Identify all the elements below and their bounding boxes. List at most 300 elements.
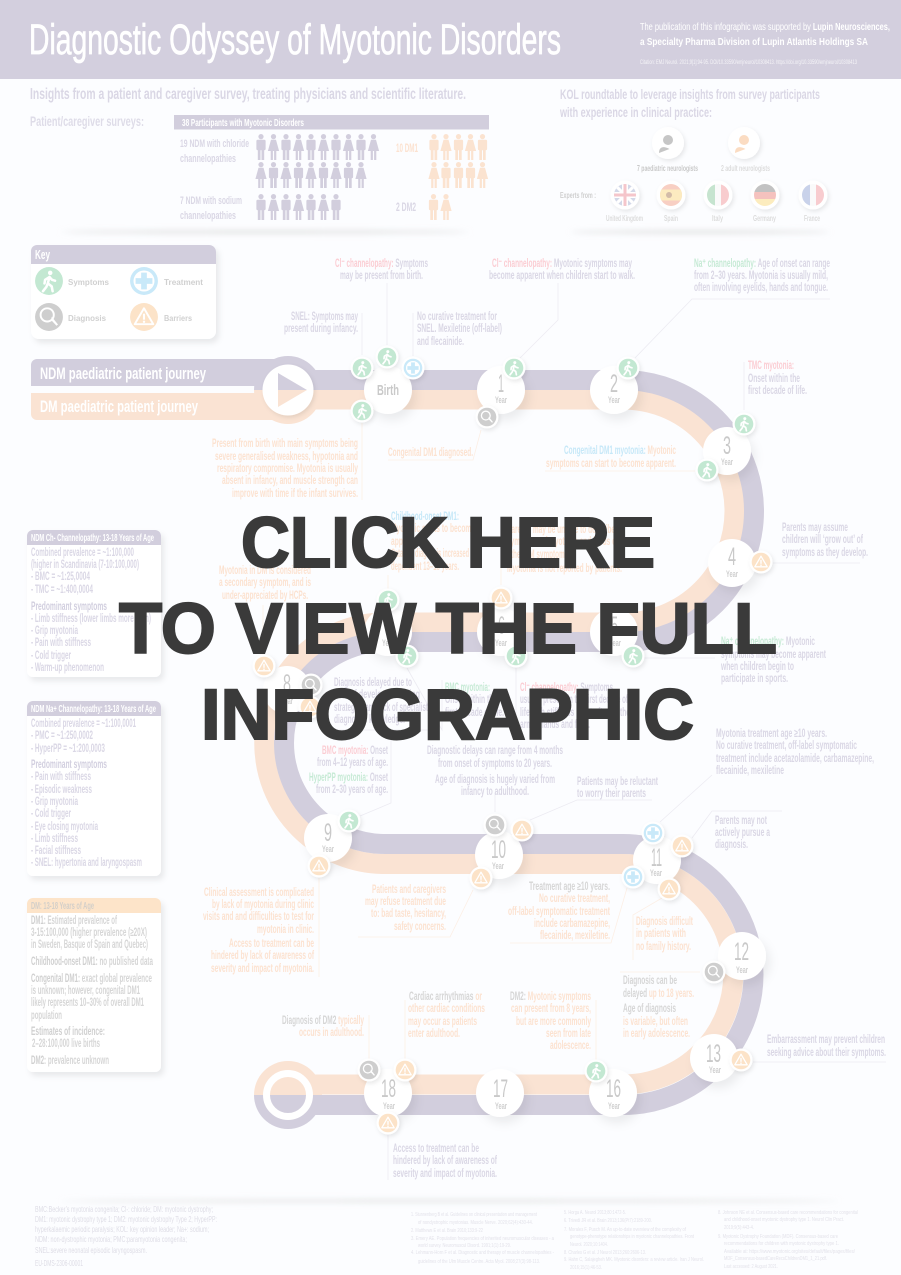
key: diagnosis bbox=[35, 303, 106, 331]
milestone: year 1 bbox=[477, 366, 525, 414]
milestone: year 2: 2 bbox=[610, 370, 618, 398]
panel: key bbox=[31, 245, 216, 339]
note: Na channelopathy sports: symptoms may become apparent bbox=[721, 649, 826, 661]
NDM sodium label: 7 NDM with sodium bbox=[180, 195, 242, 207]
key: symptoms: Symptoms bbox=[68, 277, 109, 287]
symptoms list: Predominant symptoms bbox=[31, 601, 107, 613]
note: diagnosis delayed up to 18 years: Diagnosis can be bbox=[623, 975, 677, 987]
symptoms list: - Grip myotonia bbox=[31, 796, 78, 808]
footer: references column 3: recommendations for children with myotonic dystrophy type 1. bbox=[724, 1241, 839, 1247]
footer: abbreviations: SNEL:severe neonatal episodic laryngospasm. bbox=[35, 1245, 147, 1255]
journey track: peach DM and purple NDM ribbons bbox=[264, 380, 754, 1105]
note: DM2 myotonic symptoms: seen from late bbox=[546, 1028, 591, 1040]
note: childhood-onset DM1: dependent 13–18 years. bbox=[391, 561, 459, 573]
note: Cl channelopathy from birth: may be present from birth. bbox=[340, 270, 423, 282]
footer: references column 2 bbox=[564, 1210, 704, 1271]
note: diagnostic delays: Age of diagnosis is hugely varied from bbox=[435, 774, 555, 786]
note: present from birth: Present from birth with main symptoms being bbox=[212, 438, 358, 450]
note: Cl channelopathy from birth: Cl⁻ channelopathy: Symptoms bbox=[335, 258, 428, 270]
note: Cl channelopathy walking: Cl⁻ channelopathy: Myotonic symptoms may bbox=[492, 258, 632, 270]
note: childhood-onset DM1 bbox=[391, 511, 475, 573]
milestone: year 16: 16 bbox=[606, 1075, 621, 1103]
participants bar bbox=[174, 115, 489, 130]
milestone: year 8: 8 bbox=[283, 670, 291, 698]
DM facts: Estimates of incidence: bbox=[31, 1026, 105, 1038]
note: myotonia secondary symptom bbox=[219, 565, 311, 602]
note: diagnosis delayed bbox=[334, 677, 428, 726]
symptoms list: - Facial stiffness bbox=[31, 845, 81, 857]
DM2 pictogram bbox=[429, 194, 452, 220]
flag: Italy bbox=[704, 180, 732, 210]
prevalence list bbox=[31, 547, 139, 596]
note: parents unable to describe bbox=[507, 524, 622, 575]
note: diagnosis delayed: strategies and lack of specialist bbox=[334, 702, 428, 714]
note: clinical assessment: visits and and difficulties to test for bbox=[203, 911, 314, 923]
milestone: year 16 bbox=[589, 1069, 637, 1117]
prevalence list: Combined prevalence = ~1:100,000 bbox=[31, 547, 134, 559]
milestone: year 7: Year bbox=[382, 638, 394, 649]
note: Na channelopathy sports bbox=[720, 636, 826, 685]
NDM chloride pictogram bbox=[255, 134, 379, 188]
footer: references column 1: 1. Stunnenberg B et al. Guidelines on clinical presentation and management bbox=[411, 1212, 537, 1218]
DM2 label: 2 DM2 bbox=[396, 202, 416, 214]
DM journey bar bbox=[31, 393, 288, 420]
note: diagnostic delays: from onset of symptoms to 20 years. bbox=[438, 758, 552, 770]
DM1 label: 10 DM1 bbox=[396, 143, 418, 155]
footer: references column 3: Last accessed: 2 August 2021. bbox=[724, 1264, 778, 1270]
note: TMC myotonia onset: TMC myotonia: bbox=[748, 360, 794, 372]
key heading: Key bbox=[35, 247, 50, 262]
survey heading: Insights from a patient and caregiver survey, treating physicians and scientific literature. bbox=[30, 86, 466, 103]
milestone: year 18 bbox=[364, 1069, 412, 1117]
note: diagnostic delays: Diagnostic delays can range from 4 months bbox=[427, 745, 563, 757]
NDM chloride label: 19 NDM with chloride bbox=[180, 138, 249, 150]
NDM sodium label: channelopathies bbox=[180, 210, 236, 222]
note: refusing treatment: Patients and caregivers bbox=[372, 884, 446, 896]
milestone: birth bbox=[364, 366, 412, 414]
panel: KOL roundtable bbox=[559, 86, 828, 223]
note: diagnosis delayed up to 18 years: Age of diagnosis bbox=[623, 1003, 676, 1015]
symptoms list: Predominant symptoms bbox=[31, 759, 107, 771]
milestone: year 8 bbox=[263, 666, 311, 714]
note: Cl channelopathy from birth bbox=[335, 258, 428, 282]
icon: adult neurologists bbox=[728, 127, 760, 159]
note: BMC and HyperPP onset: BMC myotonia: Onset bbox=[322, 745, 388, 757]
note: parents unable to describe: Myotonia is not reported by patients. bbox=[507, 563, 622, 575]
note: DM treatment age: include carbamazepine, bbox=[534, 918, 610, 930]
milestone: year 3: Year bbox=[721, 457, 733, 468]
call to action overlay: INFOGRAPHIC bbox=[201, 676, 694, 755]
milestone: year 3: 3 bbox=[723, 432, 731, 460]
footer: abbreviations: NDM: non-dystrophic myotonia; PMC:paramyotonia congenita; bbox=[35, 1234, 187, 1244]
note: DM treatment age: No curative treatment, bbox=[539, 893, 610, 905]
symptoms list: - Eye closing myotonia bbox=[31, 821, 98, 833]
milestone: year 1: Year bbox=[495, 395, 507, 406]
note: myotonia treatment age: Myotonia treatment age ≥10 years. bbox=[716, 728, 827, 740]
panel heading: NDM Na+ Channelopathy: 13-18 Years of Age bbox=[31, 703, 156, 715]
footer: references column 2: 8. Charles G et al. J Neurol 2013;260:2606-13. bbox=[564, 1250, 646, 1256]
note: diagnostic delays bbox=[427, 745, 563, 798]
note: Na channelopathy onset: Na⁺ channelopathy: Age of onset can range bbox=[694, 258, 830, 270]
note: DM treatment age: flecainide, mexiletine. bbox=[540, 930, 610, 942]
footer: abbreviations: BMC:Becker’s myotonia congenita; Cl-: chloride; DM: myotonic dystrophy; bbox=[35, 1204, 213, 1214]
symptoms list: - Episodic weakness bbox=[31, 784, 92, 796]
note: parents unable to describe: other DM symptoms. bbox=[507, 549, 570, 561]
key: diagnosis: Diagnosis bbox=[68, 313, 106, 323]
note: BMC and HyperPP onset bbox=[309, 745, 388, 796]
milestone: year 9: 9 bbox=[324, 819, 332, 847]
symptoms list: - Cold trigger bbox=[31, 808, 71, 820]
note: DM2 myotonic symptoms: but are more commonly bbox=[516, 1016, 591, 1028]
milestone: year 2: Year bbox=[608, 395, 620, 406]
milestone: year 17: Year bbox=[495, 1101, 507, 1112]
note: diagnosis delayed up to 18 years: is variable, but often bbox=[623, 1016, 688, 1028]
note: clinical assessment: hindered by lack of awareness of bbox=[211, 950, 314, 962]
note: myotonia treatment age bbox=[716, 728, 874, 777]
note: diagnosis difficult: Diagnosis difficult bbox=[636, 916, 693, 928]
note: BMC myotonia within first decade: BMC myotonia: bbox=[445, 682, 490, 694]
note: SNEL symptoms: present during infancy. bbox=[284, 323, 358, 335]
KOL heading: with experience in clinical practice: bbox=[559, 104, 712, 120]
milestone: year 10: Year bbox=[492, 861, 504, 872]
footer: references column 3 bbox=[718, 1210, 858, 1270]
neurologist labels: 2 adult neurologists bbox=[721, 164, 770, 173]
note: childhood-onset DM1: apparent. bbox=[391, 536, 421, 548]
prevalence list: Combined prevalence = ~1:100,0001 bbox=[31, 718, 136, 730]
DM facts: Congenital DM1: exact global prevalence bbox=[31, 973, 152, 985]
note: SNEL symptoms: SNEL: Symptoms may bbox=[291, 311, 358, 323]
DM facts: population bbox=[31, 1010, 62, 1022]
note: Cl channelopathy decade: arms, hands and face. bbox=[520, 719, 590, 731]
note: DM treatment age bbox=[508, 881, 610, 942]
country labels: Spain bbox=[664, 214, 678, 223]
note: diagnosis delayed: diagnostic knowledge. bbox=[334, 714, 405, 726]
country labels: Italy bbox=[712, 214, 723, 223]
note: BMC myotonia within first decade bbox=[445, 682, 504, 719]
journey end marker bbox=[254, 1061, 322, 1129]
milestone: year 17: 17 bbox=[493, 1075, 508, 1103]
note: access to treatment: Access to treatment can be bbox=[393, 1143, 479, 1155]
header banner bbox=[0, 0, 901, 79]
panel heading: DM: 13-18 Years of Age bbox=[31, 900, 94, 912]
experts from label: Experts from : bbox=[560, 191, 596, 200]
NDM chloride label: channelopathies bbox=[180, 153, 236, 165]
note: Cl channelopathy decade: life with stiffness most often in the bbox=[520, 707, 630, 719]
note: TMC myotonia onset: Onset within the bbox=[748, 373, 800, 385]
key: barriers bbox=[130, 303, 192, 331]
note: diagnosis difficult: in patients with bbox=[636, 928, 686, 940]
note: clinical assessment: myotonia in clinic. bbox=[257, 924, 314, 936]
milestone: year 7: 7 bbox=[384, 612, 392, 640]
note: Na channelopathy onset bbox=[694, 258, 830, 294]
NDM chloride label bbox=[180, 138, 249, 165]
note: embarrassment bbox=[767, 1034, 886, 1059]
note: DM treatment age: Treatment age ≥10 years. bbox=[529, 881, 610, 893]
note: DM treatment age: off-label symptomatic treatment bbox=[508, 906, 610, 918]
NDM journey bar bbox=[31, 359, 288, 386]
milestone: year 13: 13 bbox=[706, 1040, 721, 1068]
note: diagnosis of DM2: Diagnosis of DM2 typically bbox=[282, 1015, 364, 1027]
note: parents may not pursue bbox=[715, 815, 770, 851]
footer: references column 1: world survey. Neuromuscul Disord. 1991;1(1):19-29. bbox=[417, 1243, 511, 1249]
panel heading: NDM Ch- Channelopathy: 13-18 Years of Age bbox=[31, 532, 154, 544]
milestone: birth: Birth bbox=[377, 382, 399, 399]
footer: references column 3: 9. Myotonic Dystrophy Foundation (MDF). Consensus-based care bbox=[718, 1234, 838, 1240]
country labels bbox=[606, 214, 820, 223]
footer: references column 3: Available at: https://www.myotonic.org/sites/default/files/pages/files/ bbox=[724, 1249, 855, 1255]
prevalence list: - TMC = ~1:400,0004 bbox=[31, 584, 93, 596]
note: Cl channelopathy walking bbox=[489, 258, 635, 282]
note: present from birth: severe generalised weakness, hypotonia and bbox=[215, 451, 358, 463]
note: clinical assessment bbox=[203, 887, 314, 975]
DM facts: is unknown; however, congenital DM1 bbox=[31, 985, 140, 997]
key: barriers: Barriers bbox=[164, 313, 192, 323]
note: diagnosis delayed up to 18 years: delayed up to 18 years. bbox=[623, 988, 694, 1000]
NDM journey bar: NDM paediatric patient journey bbox=[40, 364, 206, 383]
milestone: year 17 bbox=[476, 1069, 524, 1117]
call to action overlay: CLICK HERE bbox=[241, 504, 655, 583]
footer: references column 1: 3. Emery AE. Population frequencies of inherited neuromuscular diseases - a bbox=[411, 1236, 555, 1242]
note: congenital DM1 myotonia bbox=[546, 445, 676, 470]
note: diagnosis difficult: no family history. bbox=[636, 941, 691, 953]
flag: Germany bbox=[750, 180, 780, 210]
NDM sodium pictogram bbox=[256, 194, 341, 220]
milestone: year 6: 6 bbox=[498, 612, 505, 640]
note: diagnosis difficult bbox=[636, 916, 693, 953]
note: parents unable to describe: symptoms of myotonia and focus on bbox=[507, 536, 620, 548]
DM facts: DM1: Estimated prevalence of bbox=[31, 915, 117, 927]
country labels: Germany bbox=[753, 214, 776, 223]
DM facts bbox=[31, 915, 153, 1067]
DM facts: Childhood-onset DM1: no published data bbox=[31, 956, 153, 968]
milestone: year 11: 11 bbox=[651, 844, 662, 872]
footer: references column 2: 7. Morales F, Pusch M. An up-to-date overview of the complexity of bbox=[564, 1227, 686, 1233]
milestone: year 10 bbox=[475, 831, 523, 879]
leader lines bbox=[263, 283, 886, 1180]
milestone: year 18: Year bbox=[383, 1101, 395, 1112]
footer: abbreviations: DM1: myotonic dystrophy type 1; DM2: myotonic dystrophy Type 2; HyperPP: bbox=[35, 1214, 217, 1224]
note: Na channelopathy sports: participate in sports. bbox=[721, 673, 788, 685]
footer: references column 2: 5. Horga A. Neurol 2013;80:1472-5. bbox=[564, 1210, 626, 1216]
annotations: years 9 to 11 bbox=[203, 728, 874, 975]
milestone: year 13 bbox=[690, 1034, 738, 1082]
call to action overlay: TO VIEW THE FULL bbox=[119, 590, 777, 669]
flag: United Kingdom bbox=[610, 180, 640, 210]
sponsor statement bbox=[640, 21, 890, 48]
note: myotonia secondary symptom: a secondary symptom, and is bbox=[219, 577, 311, 589]
footer: references column 2: 9. Hahn C, Salajegheh MK. Myotonic disorders: a review article. Iran J Neurol. bbox=[564, 1257, 704, 1263]
panel: NDM sodium channelopathy bbox=[27, 701, 161, 876]
note: TMC myotonia onset: first decade of life. bbox=[748, 385, 807, 397]
note: reluctant to worry parents bbox=[577, 776, 658, 800]
note: diagnosis delayed up to 18 years bbox=[623, 975, 694, 1040]
note: congenital DM1 myotonia: symptoms can start to become apparent. bbox=[546, 458, 676, 470]
NDM sodium label bbox=[180, 195, 242, 222]
note: access to treatment bbox=[393, 1143, 497, 1180]
participants bar: 38 Participants with Myotonic Disorders bbox=[182, 118, 304, 129]
milestone: year 9: Year bbox=[322, 844, 334, 855]
note: DM2 myotonic symptoms bbox=[510, 991, 591, 1052]
footer: references column 2: genotype-phenotype relationships in myotonic channelopathies. Front bbox=[570, 1234, 694, 1240]
note: parents unable to describe: Parents may be unable to describe bbox=[507, 524, 615, 536]
note: BMC and HyperPP onset: from 4–12 years of age. bbox=[317, 757, 388, 769]
milestone: year 12: Year bbox=[736, 965, 748, 976]
panel: NDM chloride channelopathy bbox=[27, 530, 161, 677]
note: cardiac arrhythmias bbox=[408, 991, 485, 1040]
milestone: year 12 bbox=[718, 932, 766, 980]
DM facts: in Sweden, Basque of Spain and Quebec) bbox=[31, 939, 148, 951]
note: cardiac arrhythmias: enter adulthood. bbox=[408, 1028, 460, 1040]
note: SNEL treatment: SNEL. Mexiletine (off-label) bbox=[417, 323, 502, 335]
symptoms list: - Pain with stiffness bbox=[31, 771, 91, 783]
DM facts: 2–28:100,000 live births bbox=[32, 1038, 100, 1050]
symptoms list: - Grip myotonia bbox=[31, 625, 78, 637]
symptoms list: - SNEL: hypertonia and laryngospasm bbox=[31, 857, 142, 869]
note: grow out of symptoms: Parents may assume bbox=[782, 522, 848, 534]
prevalence list: (higher in Scandinavia (7-10:100,000) bbox=[31, 559, 139, 571]
note: DM2 myotonic symptoms: can present from 8 years, bbox=[511, 1003, 591, 1015]
milestone: year 7 bbox=[364, 608, 412, 656]
note: myotonia secondary symptom: under-appreciated by HCPs. bbox=[222, 590, 308, 602]
milestone: year 4: 4 bbox=[728, 543, 736, 571]
note: diagnostic delays: infancy to adulthood. bbox=[461, 786, 529, 798]
note: diagnosis delayed: Diagnosis delayed due to bbox=[334, 677, 412, 689]
milestone: year 6: Year bbox=[495, 638, 507, 649]
call to action overlay bbox=[119, 504, 777, 755]
note: BMC myotonia within first decade: first decade of life. bbox=[445, 707, 504, 719]
note: present from birth bbox=[212, 438, 358, 500]
milestone: year 5: Year bbox=[609, 638, 621, 649]
note: Cl channelopathy decade bbox=[520, 682, 630, 731]
note: congenital DM1 diagnosed: Congenital DM1 diagnosed. bbox=[388, 447, 473, 459]
note: myotonia secondary symptom: Myotonia in DM is considered bbox=[219, 565, 311, 577]
note: cardiac arrhythmias: Cardiac arrhythmias or bbox=[409, 991, 482, 1003]
panel: DM bbox=[27, 898, 161, 1072]
milestone: year 8: Year bbox=[281, 696, 293, 707]
symptoms list: - Pain with stiffness bbox=[31, 637, 91, 649]
note: SNEL treatment bbox=[417, 311, 502, 348]
footer: references column 3: 2019;9(5):443-4. bbox=[724, 1225, 754, 1231]
small category icons along the journey bbox=[252, 346, 772, 1134]
symptoms list: - Cold trigger bbox=[31, 650, 71, 662]
note: grow out of symptoms bbox=[782, 522, 868, 559]
DM facts: likely represents 10–30% of overall DM1 bbox=[31, 997, 144, 1009]
symptoms list: - Limb stiffness bbox=[31, 833, 78, 845]
footer: references column 2: 6. Trivedi JR et al. Brain 2013;136(Pt7):2189-200. bbox=[564, 1218, 652, 1224]
surveys subheading: Patient/caregiver surveys: bbox=[30, 113, 144, 129]
milestone: year 10: 10 bbox=[491, 836, 506, 864]
DM facts: DM2: prevalence unknown bbox=[31, 1055, 109, 1067]
note: myotonia treatment age: flecainide, mexiletine bbox=[716, 765, 784, 777]
note: SNEL treatment: No curative treatment for bbox=[417, 311, 497, 323]
note: clinical assessment: by lack of myotonia during clinic bbox=[212, 899, 314, 911]
milestone: year 13: Year bbox=[709, 1065, 721, 1076]
note: congenital DM1 myotonia: Congenital DM1 myotonia: Myotonic bbox=[564, 445, 676, 457]
note: childhood-onset DM1: Myotonic starts to become bbox=[391, 523, 475, 535]
note: clinical assessment: Access to treatment can be bbox=[229, 938, 314, 950]
DM journey bar: DM paediatric patient journey bbox=[40, 397, 198, 416]
key: treatment bbox=[130, 267, 203, 295]
note: Cl channelopathy decade: usually present in the first decade of bbox=[520, 694, 628, 706]
footer: references column 3: and childhood-onset myotonic dystrophy type 1. Neurol Clin Pract. bbox=[724, 1217, 844, 1223]
note: Cl channelopathy decade: Cl⁻ channelopathy: Symptoms bbox=[520, 682, 613, 694]
annotations: years 12 to 18 bbox=[282, 975, 886, 1180]
note: BMC and HyperPP onset: HyperPP myotonia: Onset bbox=[309, 772, 388, 784]
milestone: year 5: 5 bbox=[611, 612, 618, 640]
note: BMC and HyperPP onset: from 2–30 years of age. bbox=[316, 784, 388, 796]
footer: references column 3: MDF_Consensus-basedCareRecsChildrenDM1_1_21.pdf. bbox=[724, 1256, 827, 1262]
footer: references column 1 bbox=[411, 1212, 555, 1265]
note: parents may not pursue: diagnosis. bbox=[715, 839, 748, 851]
icon: paediatric neurologists bbox=[652, 127, 684, 159]
note: access to treatment: severity and impact of myotonia. bbox=[393, 1168, 497, 1180]
milestone: year 11: Year bbox=[650, 868, 662, 879]
note: diagnosis of DM2 bbox=[282, 1015, 364, 1039]
note: parents may not pursue: Parents may not bbox=[715, 815, 767, 827]
neurologist labels: 7 paediatric neurologists bbox=[637, 164, 698, 173]
footer: references column 1: guidelines of the Ulm Muscle Centre. Acta Myol. 2008;27(3):98-113. bbox=[418, 1259, 540, 1265]
note: cardiac arrhythmias: may occur as patients bbox=[408, 1016, 477, 1028]
milestone: year 12: 12 bbox=[734, 938, 749, 966]
note: clinical assessment: severity and impact of myotonia. bbox=[211, 963, 314, 975]
note: childhood-onset DM1: Childhood-onset DM1: bbox=[391, 511, 459, 523]
country labels: United Kingdom bbox=[606, 214, 643, 223]
note: Na channelopathy sports: when children begin to bbox=[720, 661, 794, 673]
prevalence list: - HyperPP = ~1:200,0003 bbox=[31, 743, 105, 755]
note: DM2 myotonic symptoms: adolescence. bbox=[550, 1040, 591, 1052]
key: treatment: Treatment bbox=[164, 277, 203, 287]
symptoms list: - Limb stiffness (lower limbs more than) bbox=[31, 613, 151, 625]
note: DM2 myotonic symptoms: DM2: Myotonic symptoms bbox=[510, 991, 591, 1003]
prevalence list: - PMC = ~1:250,0002 bbox=[31, 730, 93, 742]
annotations: years 5 to 8 bbox=[219, 511, 826, 731]
milestone: year 4: Year bbox=[726, 569, 738, 580]
milestone: year 3 bbox=[703, 427, 751, 475]
note: refusing treatment: safety concerns. bbox=[394, 921, 446, 933]
note: Cl channelopathy walking: become apparent when children start to walk. bbox=[489, 270, 635, 282]
flag: France bbox=[798, 180, 828, 210]
note: diagnosis delayed: lack of developed testing bbox=[334, 689, 420, 701]
year milestone circles bbox=[263, 366, 766, 1117]
note: present from birth: respiratory compromise. Myotonia is usually bbox=[217, 463, 358, 475]
prevalence list bbox=[31, 718, 136, 755]
milestone: year 16: Year bbox=[608, 1101, 620, 1112]
note: reluctant to worry parents: to worry their parents bbox=[577, 788, 646, 800]
key: symptoms bbox=[35, 267, 109, 295]
milestone: year 11 bbox=[633, 836, 681, 884]
note: present from birth: absent in infancy, and muscle strength can bbox=[222, 475, 358, 487]
footer: abbreviations: hyperkalaemic periodic paralysis; KOL: key opinion leader; Na+: sodium; bbox=[35, 1224, 209, 1234]
milestone: year 9 bbox=[304, 814, 352, 862]
journey start: labels and play button bbox=[31, 356, 322, 424]
KOL heading bbox=[559, 86, 820, 120]
title: Diagnostic Odyssey of Myotonic Disorders bbox=[29, 16, 561, 64]
icon: play triangle bbox=[278, 373, 307, 407]
DM1 pictogram bbox=[428, 134, 488, 188]
note: reluctant to worry parents: Patients may be reluctant bbox=[577, 776, 658, 788]
note: refusing treatment: to: bad taste, hesitancy, bbox=[371, 908, 446, 920]
note: access to treatment: hindered by lack of awareness of bbox=[393, 1155, 497, 1167]
prevalence list: - BMC = ~1:25,0004 bbox=[31, 571, 90, 583]
symptoms list: - Warm-up phenomenon bbox=[31, 662, 104, 674]
milestone: year 1: 1 bbox=[498, 370, 504, 398]
note: present from birth: improve with time if the infant survives. bbox=[232, 488, 358, 500]
note: TMC myotonia onset bbox=[748, 360, 807, 397]
symptoms list bbox=[31, 601, 151, 674]
footer: abbreviations: EU-DMS-2306-00001 bbox=[35, 1258, 83, 1268]
footer: references column 1: 4. Lehmann-Horn F et al. Diagnostic and therapy of muscle channelopathies - bbox=[411, 1250, 554, 1256]
note: SNEL symptoms bbox=[284, 311, 358, 335]
